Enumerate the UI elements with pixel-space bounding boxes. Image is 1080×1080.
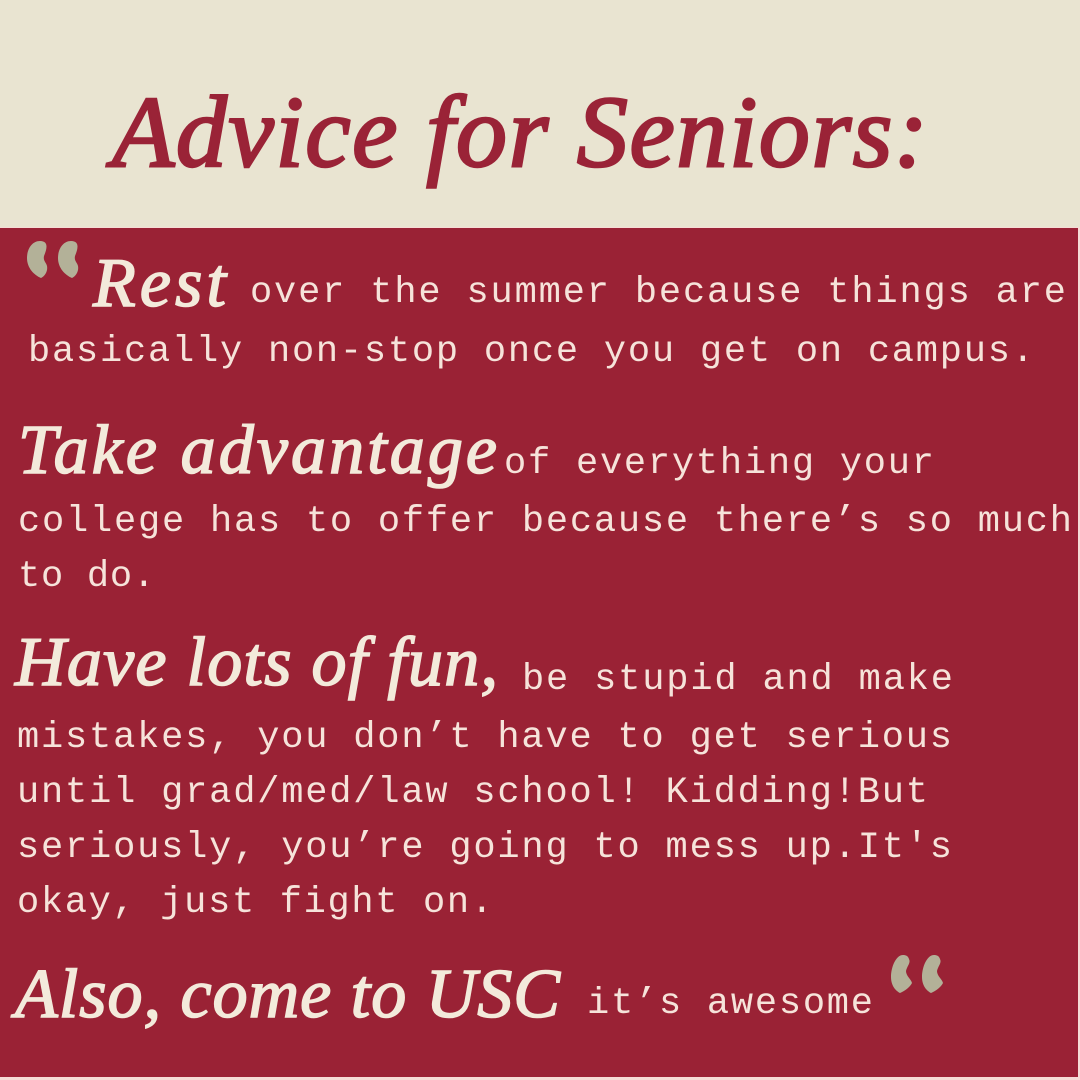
icon: closing quotation mark <box>891 955 943 993</box>
text block: rest advice: basically non-stop once you get on campus. <box>28 331 1034 373</box>
text block: have fun advice: okay, just fight on. <box>17 882 493 924</box>
text block: have fun advice: seriously, you’re going to mess up.It's <box>17 827 952 869</box>
text block: take advantage advice <box>18 412 1072 598</box>
panel: advice background <box>0 228 1078 1077</box>
text block: rest advice: over the summer because things are <box>250 272 1066 314</box>
text block: take advantage advice: to do. <box>18 556 155 598</box>
text block: come to USC <box>11 956 873 1033</box>
text block: have fun advice: mistakes, you don’t have to get serious <box>17 717 952 759</box>
text block: have fun advice: be stupid and make <box>522 659 953 701</box>
text block: have fun advice <box>14 624 953 924</box>
text block: take advantage advice: of everything your <box>504 443 934 485</box>
text block: rest advice: Rest <box>92 245 228 322</box>
text block: come to USC: Also, come to USC <box>11 956 561 1033</box>
icon: opening quotation mark <box>27 241 78 278</box>
text block: rest advice <box>28 245 1066 373</box>
title: Advice for Seniors: <box>106 76 928 189</box>
text block: take advantage advice: college has to offer because there’s so much <box>18 501 1072 543</box>
text block: have fun advice: until grad/med/law school! Kidding!But <box>17 772 928 814</box>
text block: take advantage advice: Take advantage <box>18 412 497 489</box>
text block: come to USC: it’s awesome <box>587 983 873 1025</box>
text block: have fun advice: Have lots of fun, <box>14 624 498 701</box>
header band <box>0 0 1080 227</box>
